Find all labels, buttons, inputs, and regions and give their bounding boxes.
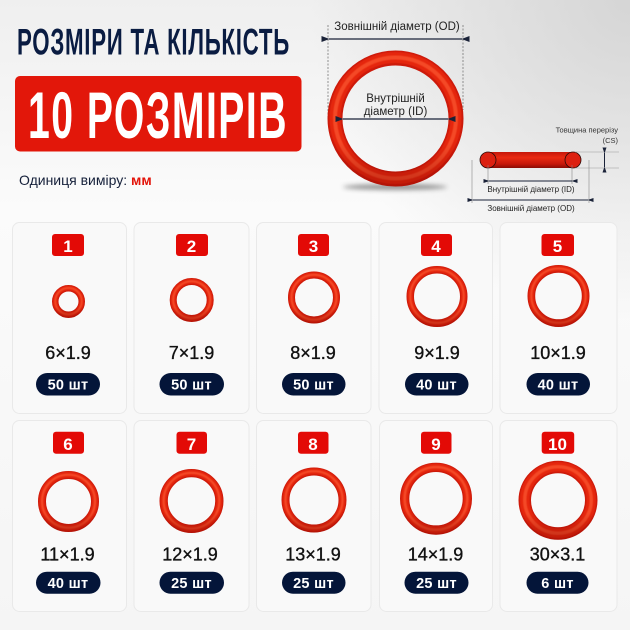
panel: size 8: 13×1.9 [285,544,341,564]
diagram: large ring with OD and ID: діаметр (ID) [364,106,427,118]
diagram: large ring with OD and ID [328,21,463,190]
panel: size 9: 9 [431,435,441,454]
panel: size 1: 1 [63,237,73,256]
panel: size 10: 30×3.1 [530,544,585,564]
panel: size 9: 25 шт [416,576,457,592]
panel: size 3: 50 шт [293,378,334,394]
diagram: side view with CS, ID and OD: (CS) [603,136,618,145]
panel: size 3 [256,222,371,414]
panel: size 6: 40 шт [48,576,88,592]
diagram: side view with CS, ID and OD [472,126,619,213]
panel: size 4 [379,222,492,414]
diagram: large ring with OD and ID: Внутрішній [366,93,425,105]
panel: size 2: 50 шт [171,378,212,394]
panel: size 10: 10 [548,435,567,454]
panel: size 5: 40 шт [538,378,578,394]
unit of measure note: Одиниця виміру: мм [19,172,152,188]
panel: size 6 [12,420,126,612]
panel: size 9 [380,420,492,612]
panel: size 10: 6 шт [541,576,574,592]
title: РОЗМІРИ ТА КІЛЬКІСТЬ [17,22,290,62]
panel: size 2: 2 [187,237,196,256]
panel: size 3: 8×1.9 [290,343,336,363]
panel: size 8: 8 [308,435,318,454]
panel: size 1: 50 шт [48,378,88,394]
panel: size 1: 6×1.9 [45,343,91,363]
banner: 10 sizes: 10 РОЗМІРІВ [28,78,288,152]
panel: size 4: 40 шт [416,378,457,394]
panel: size 10 [500,420,617,612]
panel: size 7: 12×1.9 [162,544,218,564]
diagram: side view with CS, ID and OD: Товщина перерізу [556,126,618,134]
panel: size 8 [256,420,371,612]
panel: size 1 [12,222,126,414]
panel: size 7 [134,420,249,612]
diagram: side view with CS, ID and OD: Внутрішній діаметр (ID) [487,185,575,194]
panel: size 2 [134,222,249,414]
panel: size 7: 7 [187,435,196,454]
panel: size 7: 25 шт [171,576,212,592]
panel: size 2: 7×1.9 [169,343,214,363]
panel: size 5: 5 [553,237,562,256]
diagram: side view with CS, ID and OD: Зовнішній діаметр (OD) [487,204,575,213]
panel: size 6: 11×1.9 [40,544,95,564]
panel: size 5 [500,222,617,414]
banner: 10 sizes [15,76,302,152]
panel: size 6: 6 [63,435,73,454]
panel: size 9: 14×1.9 [408,544,463,564]
panel: size 4: 4 [431,237,441,256]
panel: size 8: 25 шт [293,576,334,592]
panel: size 5: 10×1.9 [530,343,586,363]
diagram: large ring with OD and ID: Зовнішній діаметр (OD) [334,21,460,33]
panel: size 4: 9×1.9 [414,343,460,363]
panel: size 3: 3 [309,237,318,256]
